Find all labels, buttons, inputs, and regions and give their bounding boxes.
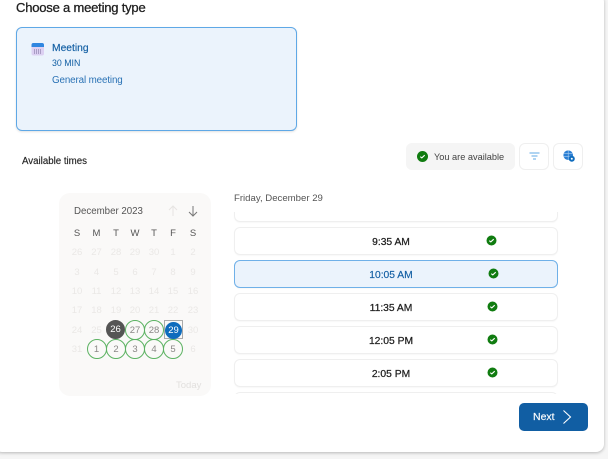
date grid: 3	[132, 344, 138, 355]
date grid: 1	[170, 247, 176, 258]
date grid: 26	[110, 324, 121, 335]
date grid: 12	[111, 286, 121, 296]
date grid: 13	[130, 286, 140, 296]
date grid: 8	[170, 266, 176, 278]
date grid	[72, 247, 198, 359]
date grid: 19	[111, 304, 121, 316]
slot 12:05 PM: 12:05 PM	[369, 336, 413, 347]
slot 2:05 PM: 2:05 PM	[372, 369, 410, 380]
partial slot bottom	[234, 392, 558, 420]
slot 12:05 PM	[234, 326, 558, 354]
icon: down arrow	[188, 206, 198, 217]
title: Choose a meeting type	[16, 0, 146, 15]
slot 9:35 AM: 9:35 AM	[372, 237, 410, 248]
weekday header: S	[190, 228, 196, 238]
weekday header: W	[131, 228, 139, 238]
weekday header	[74, 228, 196, 238]
meeting name: Meeting	[52, 43, 89, 54]
date grid: 6	[190, 344, 196, 354]
date grid: 9	[190, 266, 196, 278]
date grid: 4	[151, 344, 157, 355]
date grid: 3	[74, 266, 80, 278]
slot 9:35 AM	[234, 227, 558, 255]
icon: up arrow	[168, 206, 178, 216]
date grid: 2	[190, 247, 196, 258]
icon: calendar	[32, 43, 44, 56]
date grid: 16	[188, 286, 198, 296]
date grid: 31	[72, 344, 82, 354]
date grid: 30	[149, 247, 159, 258]
date grid: 4	[94, 266, 99, 278]
date grid: 30	[188, 324, 198, 336]
weekday header: M	[93, 228, 100, 238]
slot 11:35 AM: 11:35 AM	[370, 303, 412, 314]
weekday header: F	[170, 228, 176, 238]
partial slot top	[234, 194, 558, 222]
weekday header: T	[151, 228, 157, 238]
date grid: 7	[151, 266, 157, 278]
date grid: 22	[168, 304, 178, 316]
date grid: 10	[72, 286, 82, 296]
heading: available times: Available times	[22, 156, 87, 167]
date grid: 28	[111, 247, 121, 258]
availability status pill	[406, 143, 515, 170]
date grid: 27	[130, 325, 140, 336]
date grid: 20	[130, 304, 140, 316]
today link: Today	[176, 380, 201, 391]
date grid: 6	[132, 266, 138, 278]
date grid: 2	[113, 344, 119, 355]
slot 11:35 AM	[234, 293, 558, 321]
date grid: 28	[149, 325, 159, 336]
next button	[519, 403, 588, 431]
date grid: 11	[92, 286, 101, 296]
date grid: 29	[130, 247, 140, 258]
icon: globe	[563, 150, 575, 162]
date grid: 18	[91, 304, 102, 316]
icon: green check	[417, 151, 428, 162]
slot 10:05 AM selected: 10:05 AM	[369, 270, 413, 281]
date grid: 21	[149, 304, 159, 316]
date grid: 14	[149, 286, 159, 296]
status text: You are available	[434, 152, 504, 162]
month label: December 2023	[74, 206, 143, 217]
date grid: 15	[168, 286, 178, 296]
panel: meeting type card	[16, 27, 297, 131]
button label: Next	[533, 411, 555, 423]
filter button	[519, 143, 549, 170]
date grid: 29	[168, 325, 179, 336]
weekday header: S	[74, 228, 80, 238]
date grid: 26	[72, 247, 82, 258]
slot 10:05 AM selected	[234, 260, 558, 288]
date grid: 25	[91, 324, 102, 336]
date grid: 17	[72, 304, 82, 316]
date grid: 23	[188, 304, 198, 316]
date grid: 24	[72, 324, 82, 336]
date grid: 5	[170, 344, 176, 355]
date grid: 1	[94, 344, 99, 355]
icon: filter	[530, 152, 540, 160]
duration: 30 MIN	[52, 58, 80, 68]
weekday header: T	[113, 228, 119, 238]
icon: chevron	[563, 410, 572, 424]
date grid: 5	[113, 266, 119, 278]
date grid: 27	[91, 247, 102, 258]
time slot list	[234, 212, 558, 394]
panel: calendar	[59, 193, 211, 396]
slot 2:05 PM	[234, 359, 558, 387]
description: General meeting	[52, 75, 123, 86]
timezone button	[553, 143, 583, 170]
selected date heading: Friday, December 29	[234, 193, 323, 204]
